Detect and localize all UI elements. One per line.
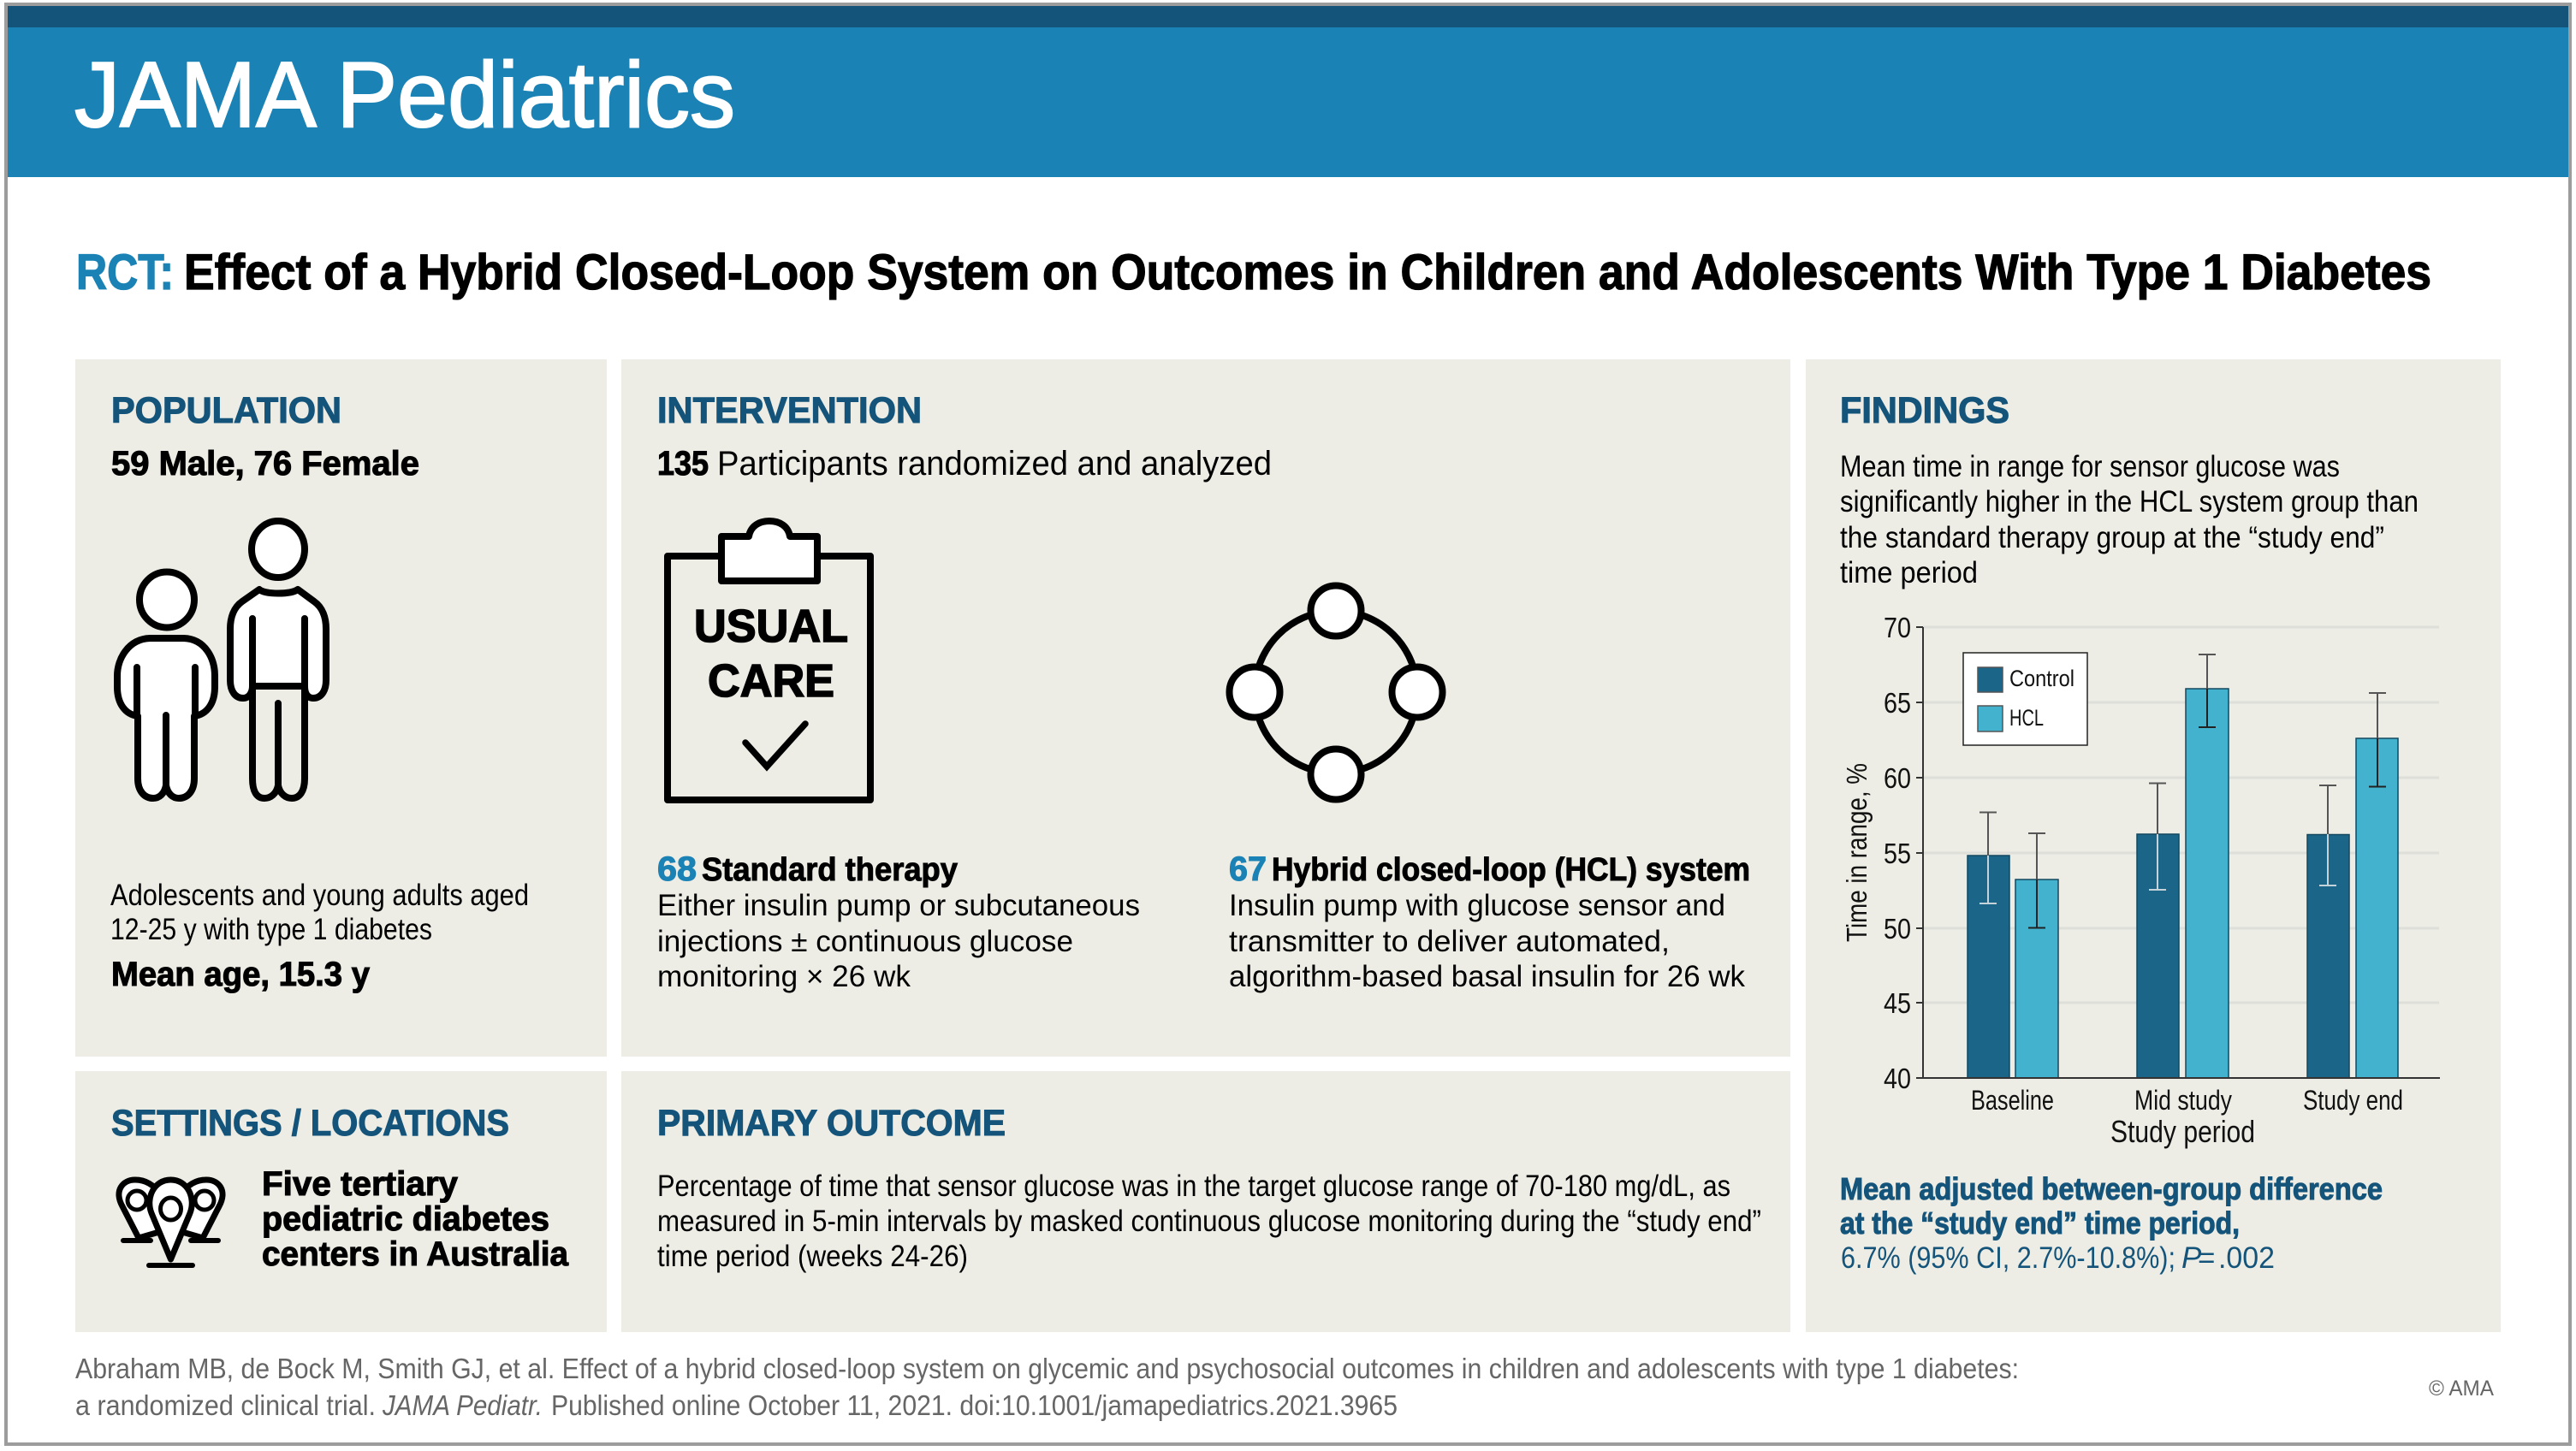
settings description: centers in Australia <box>262 1235 569 1273</box>
mean age: Mean age, 15.3 y <box>111 956 371 993</box>
icon: usual care clipboard <box>668 521 870 800</box>
citation: Published online October 11, 2021. doi:10.1001/jamapediatrics.2021.3965 <box>551 1389 1398 1421</box>
primary outcome description <box>657 1170 1761 1273</box>
header band <box>8 6 2568 177</box>
standard therapy text: Standard therapy <box>702 852 958 888</box>
HCL system text: algorithm-based basal insulin for 26 wk <box>1229 960 1745 993</box>
participants: Participants randomized and analyzed <box>717 445 1272 483</box>
standard therapy text: 68 <box>657 850 697 888</box>
y axis: 50 <box>1884 913 1911 945</box>
panel: settings and locations <box>75 1071 607 1332</box>
panel: intervention <box>621 359 1790 1057</box>
heading: population: POPULATION <box>111 390 341 431</box>
legend: Control <box>2009 666 2074 691</box>
between-group difference result: 6.7% (95% CI, 2.7%-10.8%); <box>1841 1241 2175 1275</box>
heading: primary outcome: PRIMARY OUTCOME <box>657 1103 1006 1144</box>
bar chart <box>1841 612 2440 1149</box>
x axis labels: Study end <box>2303 1085 2403 1116</box>
primary outcome description: measured in 5-min intervals by masked continuous glucose monitoring during the “study end” <box>657 1205 1761 1238</box>
HCL system text: 67 <box>1229 850 1267 888</box>
population description: Adolescents and young adults aged <box>110 879 529 912</box>
x axis labels: Mid study <box>2134 1085 2232 1116</box>
between-group difference result: P <box>2181 1241 2202 1275</box>
y axis: 65 <box>1884 687 1911 719</box>
y axis <box>1884 612 1923 1094</box>
standard therapy text: monitoring × 26 wk <box>657 960 911 993</box>
x axis labels: Baseline <box>1971 1085 2054 1116</box>
panel: population <box>75 359 607 1057</box>
HCL system text <box>1229 850 1750 993</box>
population counts: 59 Male, 76 Female <box>111 445 419 483</box>
HCL system text: Hybrid closed-loop (HCL) system <box>1272 852 1750 888</box>
heading: intervention: INTERVENTION <box>657 390 922 431</box>
bars <box>1968 689 2398 1078</box>
journal name: JAMA Pediatrics <box>74 43 735 147</box>
between-group difference result: Mean adjusted between-group difference <box>1840 1171 2383 1206</box>
settings description: Five tertiary <box>262 1165 459 1203</box>
panel: findings <box>1806 359 2501 1332</box>
citation <box>75 1353 2019 1421</box>
citation: a randomized clinical trial. <box>75 1389 376 1421</box>
citation: Abraham MB, de Bock M, Smith GJ, et al. Effect of a hybrid closed-loop system on glycemic and psychosocial outcomes in children and adolescents with type 1 diabetes: <box>75 1353 2019 1384</box>
primary outcome description: Percentage of time that sensor glucose was in the target glucose range of 70-180 mg/dL, as <box>657 1170 1730 1203</box>
heading: findings: FINDINGS <box>1840 390 2009 431</box>
icon: closed loop <box>1229 585 1443 799</box>
participants: 135 <box>657 445 709 483</box>
findings description: time period <box>1840 556 1978 589</box>
findings description <box>1840 450 2419 589</box>
standard therapy text: injections ± continuous glucose <box>657 925 1073 958</box>
between-group difference result: .002 <box>2218 1241 2275 1275</box>
legend <box>1963 653 2087 745</box>
x axis labels <box>1971 1085 2403 1116</box>
icon: location pins <box>119 1180 223 1265</box>
icon: usual care clipboard: CARE <box>708 655 834 707</box>
standard therapy text <box>657 850 1140 993</box>
title: RCT: <box>76 245 174 300</box>
panel: population: 12-25 y with type 1 diabetes <box>110 913 432 946</box>
x axis title: Study period <box>2110 1114 2255 1149</box>
standard therapy text: Either insulin pump or subcutaneous <box>657 889 1140 922</box>
settings description <box>262 1165 569 1273</box>
icon: usual care clipboard: USUAL <box>694 601 848 652</box>
x axis <box>1916 1077 2440 1079</box>
y axis: 60 <box>1884 762 1911 794</box>
error bars <box>1979 654 2386 927</box>
legend: HCL <box>2009 705 2044 731</box>
title: Effect of a Hybrid Closed-Loop System on Outcomes in Children and Adolescents With Type 1 Diabetes <box>184 245 2431 300</box>
heading: settings: SETTINGS / LOCATIONS <box>111 1103 509 1144</box>
y axis: 40 <box>1884 1063 1911 1094</box>
primary outcome description: time period (weeks 24-26) <box>657 1240 968 1273</box>
copyright: © AMA <box>2429 1377 2494 1401</box>
findings description: the standard therapy group at the “study end” <box>1840 521 2384 554</box>
between-group difference result <box>1840 1171 2383 1275</box>
citation: JAMA Pediatr. <box>382 1389 543 1421</box>
between-group difference result: at the “study end” time period, <box>1840 1205 2240 1241</box>
between-group difference result: = <box>2198 1241 2215 1275</box>
HCL system text: Insulin pump with glucose sensor and <box>1229 889 1725 922</box>
y axis: 45 <box>1884 987 1911 1019</box>
findings description: Mean time in range for sensor glucose was <box>1840 450 2340 483</box>
y axis title: Time in range, % <box>1841 763 1873 942</box>
y axis: 70 <box>1884 612 1911 643</box>
findings description: significantly higher in the HCL system group than <box>1840 485 2419 518</box>
HCL system text: transmitter to deliver automated, <box>1229 925 1670 958</box>
settings description: pediatric diabetes <box>262 1200 549 1238</box>
y axis: 55 <box>1884 838 1911 869</box>
panel: primary outcome <box>621 1071 1790 1332</box>
icon: two people <box>117 521 326 798</box>
